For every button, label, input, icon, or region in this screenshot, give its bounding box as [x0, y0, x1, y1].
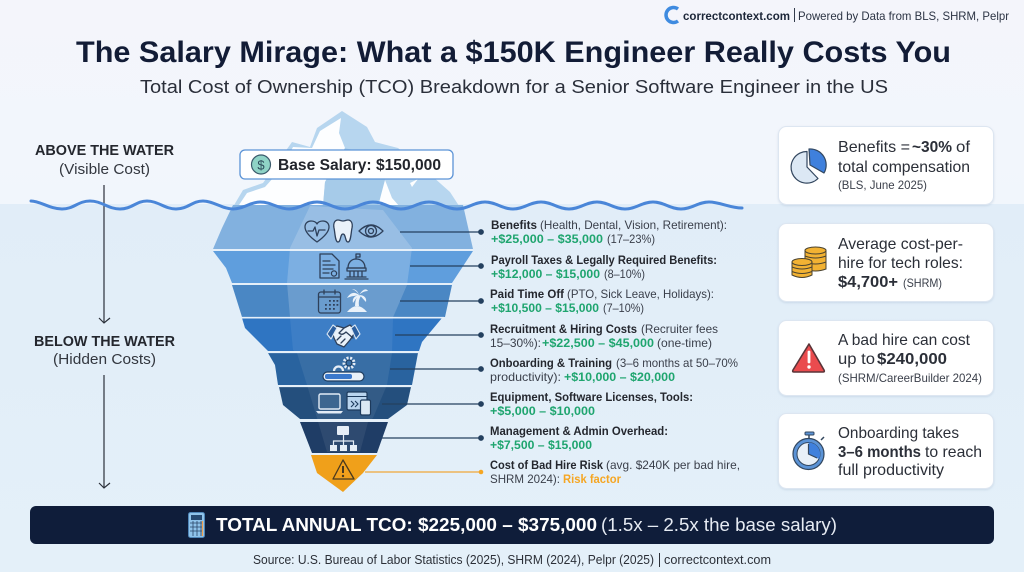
label: benefits [491, 218, 727, 246]
label: recruitment: +$22,500 – $45,000 [542, 336, 654, 350]
icon: calendar, palm island [318, 289, 368, 313]
left label: above the water: (Visible Cost) [59, 162, 150, 178]
card: onboarding time: full productivity [838, 462, 944, 479]
arrow: above to below [99, 185, 110, 323]
label: onboarding: Onboarding & Training [490, 356, 612, 370]
water line [31, 201, 742, 209]
card: onboarding time [778, 414, 994, 488]
label: recruitment [490, 322, 718, 350]
band: payroll taxes [213, 251, 473, 283]
label: paid time off [490, 287, 714, 315]
label: paid time off: +$10,500 – $15,000 [491, 301, 599, 315]
band: onboarding [268, 353, 418, 385]
base salary pill [240, 150, 453, 179]
card: cost per hire: Average cost-per- [838, 236, 963, 253]
header attribution: correctcontext.com [683, 9, 790, 23]
label: onboarding: +$10,000 – $20,000 [564, 370, 675, 384]
label: recruitment: (Recruiter fees [641, 322, 718, 336]
card: bad hire: $240,000 [877, 351, 947, 368]
icon: calculator [188, 512, 204, 538]
label: benefits: (Health, Dental, Vision, Retirement): [540, 218, 727, 232]
card: bad hire: A bad hire can cost [838, 332, 971, 349]
subtitle: Total Cost of Ownership (TCO) Breakdown for a Senior Software Engineer in the US [140, 76, 888, 97]
source line: Source: U.S. Bureau of Labor Statistics (2025), SHRM (2024), Pelpr (2025) [253, 553, 654, 567]
base salary pill: Base Salary: $150,000 [278, 157, 441, 174]
label: bad hire risk [490, 458, 740, 486]
left label: below the water: BELOW THE WATER [34, 334, 176, 350]
card: benefits share: total compensation [838, 159, 970, 176]
label: benefits: +$25,000 – $35,000 [491, 232, 603, 246]
label: recruitment: Recruitment & Hiring Costs [490, 322, 637, 336]
left label: above the water: ABOVE THE WATER [35, 143, 175, 159]
icon: handshake [327, 325, 360, 347]
label: bad hire risk: Cost of Bad Hire Risk [490, 458, 603, 472]
iceberg tip above water [230, 111, 463, 212]
left label: below the water: (Hidden Costs) [53, 352, 156, 368]
icon: warning triangle [333, 460, 354, 479]
icon: onboarding progress gear [323, 358, 364, 381]
label: bad hire risk: SHRM 2024): [490, 472, 560, 486]
icon: coins [792, 247, 826, 278]
card: benefits share: (BLS, June 2025) [838, 178, 927, 192]
inner highlight column [287, 206, 412, 452]
card: onboarding time: 3–6 months [838, 444, 921, 461]
card: bad hire: (SHRM/CareerBuilder 2024) [838, 371, 982, 385]
total TCO bar [30, 506, 994, 544]
icon: org chart [330, 426, 357, 451]
icon: tax document, capitol [320, 254, 368, 279]
label: management: Management & Admin Overhead: [490, 424, 668, 438]
label: management [490, 424, 668, 452]
left label: above the water [35, 143, 175, 178]
header attribution: Powered by Data from BLS, SHRM, Pelpr [798, 9, 1009, 23]
total TCO bar: (1.5x – 2.5x the base salary) [601, 515, 837, 535]
card: cost per hire: $4,700+ [838, 274, 898, 291]
title: The Salary Mirage: What a $150K Engineer Really Costs You [76, 36, 951, 69]
label: equipment: Equipment, Software Licenses, Tools: [490, 390, 693, 404]
card: benefits share: Benefits = [838, 139, 910, 156]
label: benefits: Benefits [491, 218, 537, 232]
label: recruitment: (one-time) [657, 336, 712, 350]
icon: stopwatch [793, 432, 824, 470]
card: onboarding time: to reach [925, 444, 982, 461]
card: bad hire [778, 320, 994, 396]
label: onboarding: productivity): [490, 370, 561, 384]
band: paid time off [232, 285, 452, 317]
label: equipment [490, 390, 693, 418]
label: equipment: +$5,000 – $10,000 [490, 404, 595, 418]
label: bad hire risk: (avg. $240K per bad hire, [606, 458, 740, 472]
card: bad hire: up to [838, 351, 875, 368]
card: benefits share [778, 126, 994, 204]
card: cost per hire: (SHRM) [903, 276, 942, 290]
source line: correctcontext.com [664, 553, 771, 567]
icon: red warning [793, 344, 824, 372]
label: payroll taxes: +$12,000 – $15,000 [491, 267, 600, 281]
icon: laptop, software window [316, 392, 370, 415]
label: onboarding: (3–6 months at 50–70% [616, 356, 738, 370]
connector: risk [365, 470, 483, 474]
card: cost per hire [778, 224, 994, 302]
icon: correctcontext logo [666, 8, 678, 22]
band: bad hire risk [311, 455, 377, 492]
label: paid time off: (7–10%) [603, 301, 644, 315]
label: management: +$7,500 – $15,000 [490, 438, 592, 452]
left label: below the water [34, 334, 176, 368]
header attribution [666, 8, 1009, 23]
label: paid time off: (PTO, Sick Leave, Holidays): [567, 287, 714, 301]
band: benefits [213, 205, 473, 249]
card: benefits share: of [956, 139, 971, 156]
card: onboarding time: Onboarding takes [838, 425, 959, 442]
upper highlight boost [287, 206, 412, 317]
label: payroll taxes: Payroll Taxes & Legally Required Benefits: [491, 253, 717, 267]
label: paid time off: Paid Time Off [490, 287, 565, 301]
card: benefits share: ~30% [912, 139, 952, 156]
label: payroll taxes: (8–10%) [604, 267, 645, 281]
band: management [300, 422, 388, 453]
label: onboarding [490, 356, 738, 384]
band separators [213, 250, 473, 454]
icon: pie chart [791, 149, 826, 183]
band: recruitment [242, 318, 442, 351]
connector lines [382, 230, 483, 440]
label: payroll taxes [491, 253, 717, 281]
label: benefits: (17–23%) [607, 232, 655, 246]
icon: heart, tooth, eye [305, 220, 383, 242]
iceberg [213, 111, 473, 492]
band: equipment [279, 387, 411, 419]
label: recruitment: 15–30%): [490, 336, 541, 350]
icon: dollar coin: $ [257, 158, 265, 172]
total TCO bar: TOTAL ANNUAL TCO: $225,000 – $375,000 [216, 515, 597, 535]
icon: dollar coin [252, 155, 270, 174]
arrow: downward hidden costs [99, 375, 110, 488]
label: bad hire risk: Risk factor [563, 472, 621, 486]
card: cost per hire: hire for tech roles: [838, 255, 963, 272]
